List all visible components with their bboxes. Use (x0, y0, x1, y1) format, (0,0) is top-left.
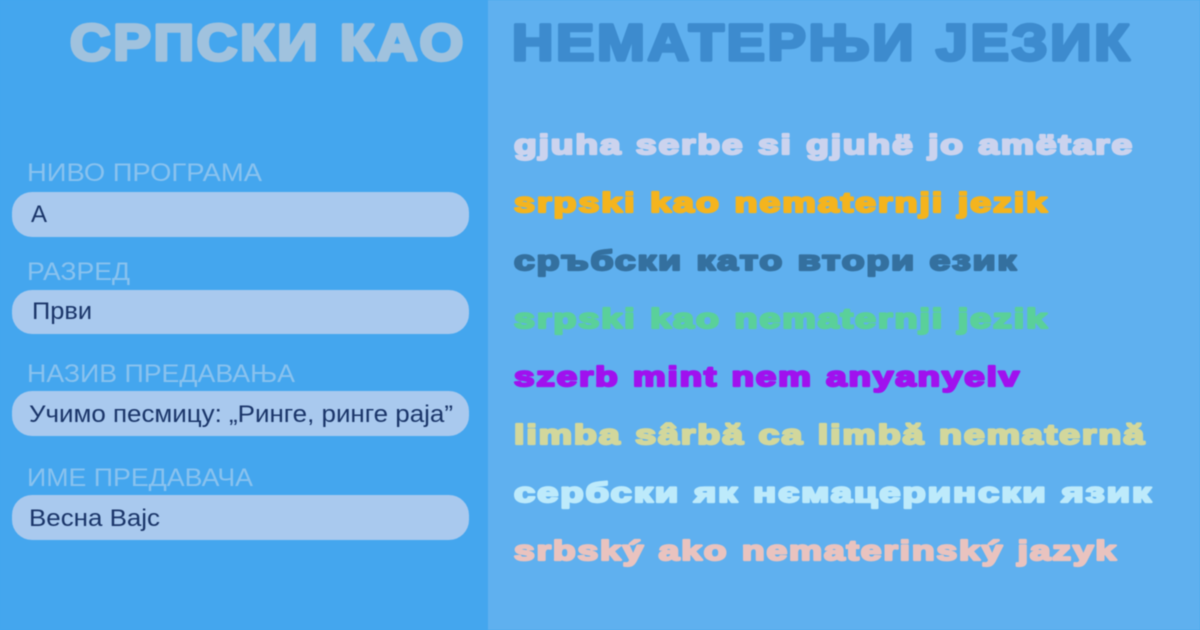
language line: Serbian Latin: srpski kao nematernji jezik (514, 187, 1049, 218)
field value: lecture title: Учимо песмицу: „Ринге, ринге раја” (29, 401, 453, 428)
panel: right background (488, 0, 1200, 630)
language list (514, 129, 1153, 566)
field label: lecture title: НАЗИВ ПРЕДАВАЊА (27, 360, 295, 388)
field value: program level: А (31, 201, 47, 228)
field label: grade: РАЗРЕД (27, 258, 130, 286)
language line: Albanian: gjuha serbe si gjuhë jo amëtare (514, 129, 1134, 160)
field pill: program level (12, 192, 469, 237)
language line: Hungarian: szerb mint nem anyanyelv (514, 361, 1021, 392)
field label: program level: НИВО ПРОГРАМА (27, 159, 262, 187)
title: right part: НЕМАТЕРЊИ ЈЕЗИК (512, 14, 1132, 71)
title: left part: СРПСКИ КАО (70, 14, 466, 71)
panel: left background (0, 0, 488, 630)
language line: Romanian: limba sârbă ca limbă nematernă (514, 419, 1146, 450)
field label: lecturer name: ИМЕ ПРЕДАВАЧА (27, 464, 253, 492)
field: lecture title (12, 360, 469, 436)
language line: Bulgarian: сръбски като втори език (514, 245, 1018, 276)
language line: Ruthenian: сербски як нємацерински язик (514, 477, 1153, 508)
field value: lecturer name: Весна Вајс (29, 505, 160, 532)
language line: Slovak: srbský ako nematerinský jazyk (514, 535, 1118, 566)
field pill: lecturer name (12, 495, 469, 540)
field pill: grade (12, 290, 469, 334)
field value: grade: Први (32, 298, 92, 325)
field pill: lecture title (12, 391, 469, 436)
language line: Bosnian/Croatian: srpski kao nematernji jezik (514, 303, 1049, 334)
field: grade (12, 258, 469, 334)
field: lecturer name (12, 464, 469, 540)
field: program level (12, 159, 469, 237)
